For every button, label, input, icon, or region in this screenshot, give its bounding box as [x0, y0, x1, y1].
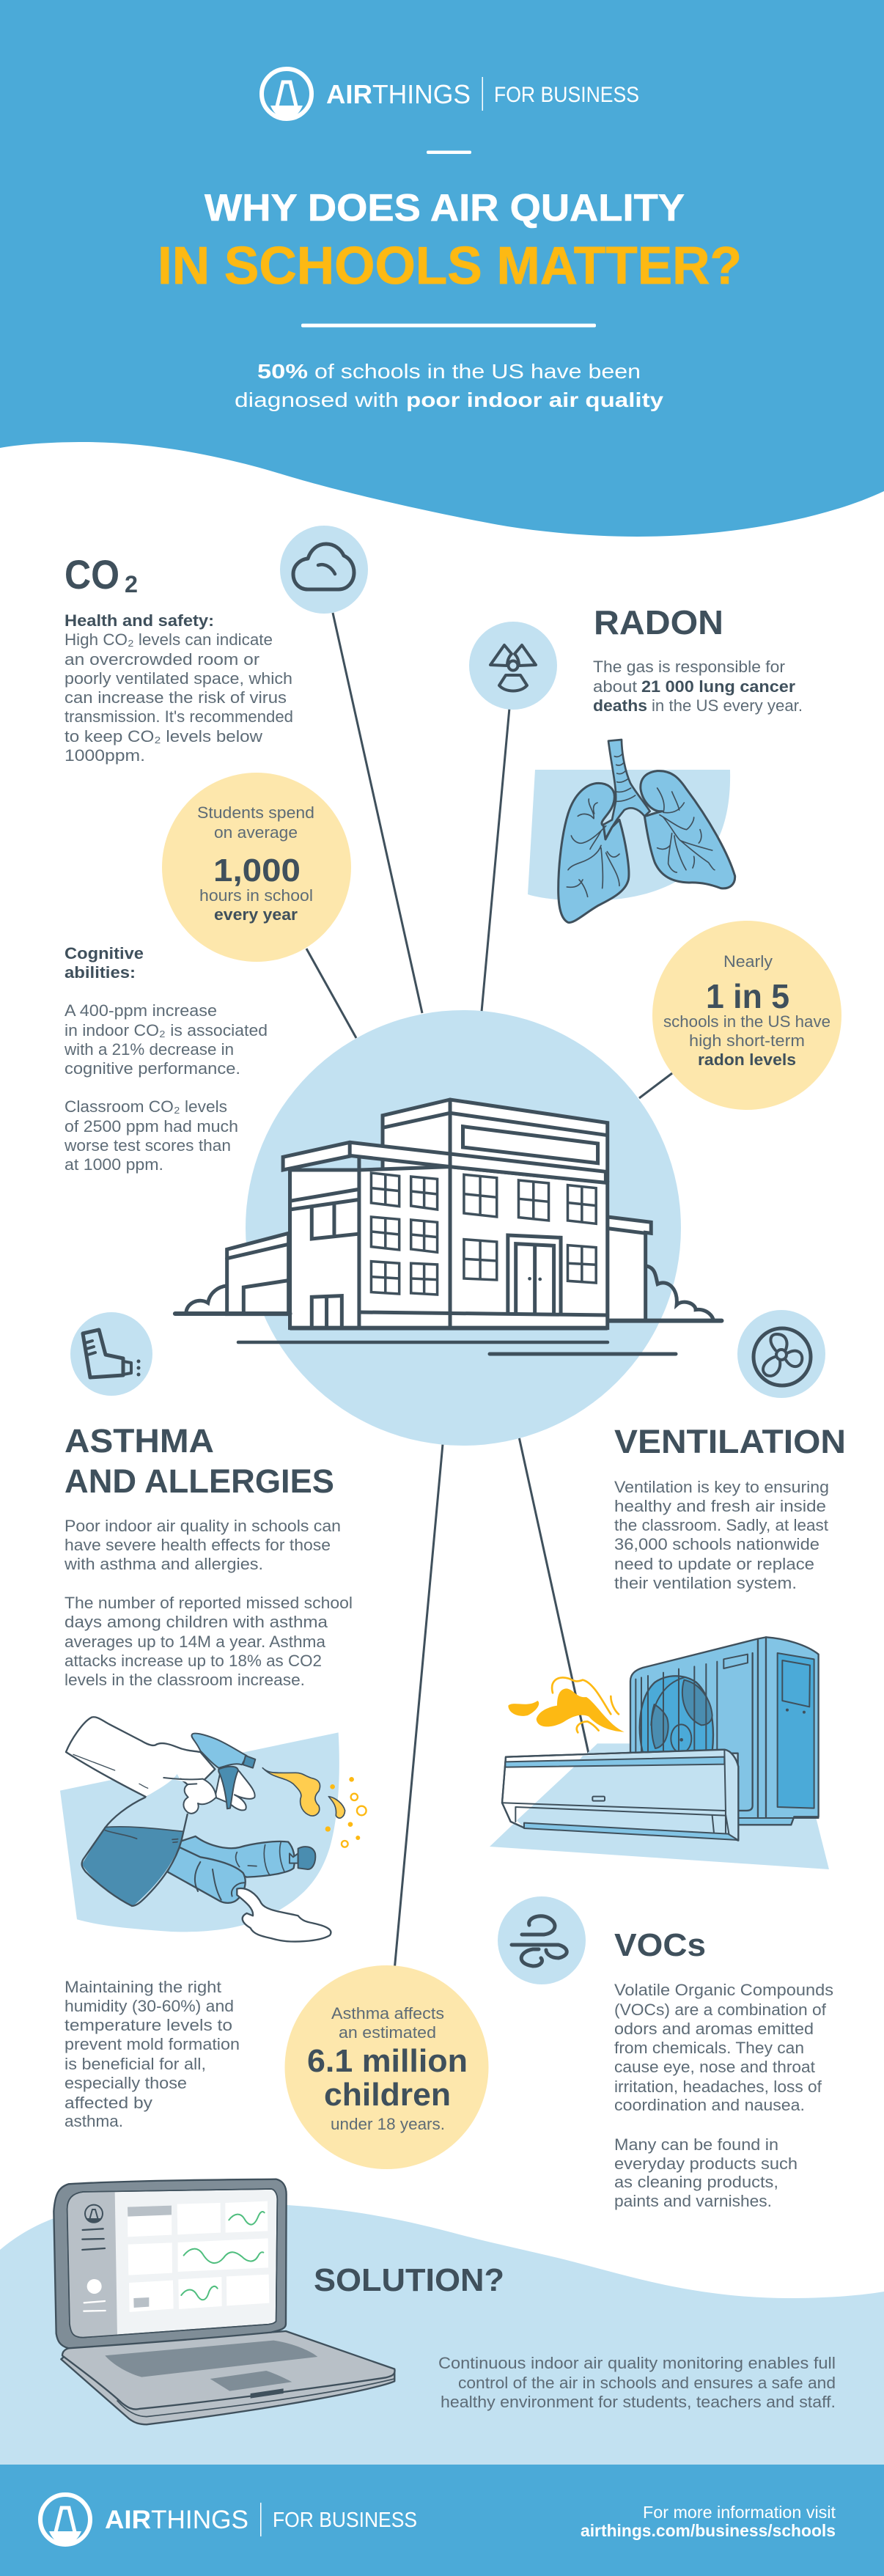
- heading: asthma and allergies: ASTHMA: [65, 1422, 214, 1460]
- text: asthma: Poor indoor air quality in schools can: [65, 1517, 341, 1535]
- text: VOCs: as cleaning products,: [614, 2173, 778, 2191]
- text: VOCs: odors and aromas emitted: [614, 2020, 814, 2038]
- callout: 6.1 million children: children: [324, 2077, 451, 2113]
- text: asthma: [64, 1517, 353, 1689]
- heading: ventilation: VENTILATION: [614, 1423, 846, 1460]
- text: cognitive abilities: abilities:: [65, 963, 136, 982]
- callout: 1,000 hours: on average: [214, 823, 298, 842]
- text: asthma: averages up to 14M a year. Asthma: [65, 1633, 326, 1651]
- text: radon: 21 000 lung cancer: [641, 677, 795, 696]
- center circle: [246, 1010, 681, 1446]
- heading: CO2: 2: [125, 571, 138, 597]
- connector lines: [306, 613, 672, 1967]
- header logo: [262, 69, 639, 119]
- text: humidity: [65, 1978, 240, 2130]
- heading: CO2: CO: [65, 551, 119, 597]
- text: humidity: especially those: [65, 2074, 187, 2092]
- ventilation section: [490, 1310, 846, 1869]
- text: health and safety: an overcrowded room or: [65, 650, 259, 669]
- school building illustration: [175, 1100, 721, 1328]
- solution wave panel: [0, 2201, 884, 2465]
- text: humidity: affected by: [65, 2094, 152, 2112]
- text: VOCs: Many can be found in: [614, 2135, 778, 2154]
- heading: VOCs: VOCs: [614, 1927, 706, 1963]
- air conditioner illustration: [490, 1637, 829, 1869]
- text: VOCs: cause eye, nose and throat: [614, 2058, 815, 2076]
- callout: 1,000 hours: 1,000: [213, 853, 301, 888]
- text: cognitive abilities: at 1000 ppm.: [65, 1155, 163, 1174]
- lungs illustration: [528, 740, 735, 922]
- header subtitle: diagnosed with: [235, 389, 399, 411]
- text: radon: [593, 658, 803, 715]
- text: humidity: Maintaining the right: [65, 1978, 221, 1996]
- heading: radon: RADON: [594, 603, 723, 641]
- heading: asthma and allergies: AND ALLERGIES: [65, 1462, 334, 1500]
- text: ventilation: their ventilation system.: [614, 1574, 797, 1592]
- radon section: [469, 603, 841, 1110]
- solution heading: SOLUTION?: [314, 2262, 504, 2298]
- title: WHY DOES AIR QUALITY: [205, 187, 685, 229]
- text: radon: deaths: [593, 696, 647, 715]
- header logo: FOR BUSINESS: [494, 83, 639, 107]
- header panel: [0, 0, 884, 537]
- solution text: control of the air in schools and ensures a safe and: [458, 2374, 836, 2392]
- text: ventilation: need to update or replace: [614, 1555, 814, 1573]
- callout: 1,000 hours: Students spend: [197, 803, 314, 822]
- text: radon: in the US every year.: [652, 696, 803, 715]
- footer link text: For more information visit: [643, 2503, 836, 2522]
- solution text: Continuous indoor air quality monitoring enables full: [438, 2354, 836, 2372]
- header logo: THINGS: [372, 79, 471, 109]
- title: IN SCHOOLS MATTER?: [158, 237, 742, 295]
- text: cognitive abilities: of 2500 ppm had much: [65, 1117, 238, 1136]
- text: health and safety: 1000ppm.: [65, 746, 145, 765]
- heading: asthma and allergies: [65, 1422, 334, 1500]
- asthma section: [60, 1312, 488, 2169]
- footer link text: [581, 2503, 836, 2540]
- callout: 1 in 5: high short-term: [689, 1031, 805, 1050]
- text: cognitive abilities: in indoor CO₂ is associated: [65, 1021, 268, 1039]
- header subtitle: [235, 360, 663, 411]
- footer logo: FOR BUSINESS: [273, 2509, 417, 2532]
- icon: radiation: [469, 622, 557, 710]
- text: VOCs: irritation, headaches, loss of: [614, 2078, 822, 2096]
- text: cognitive abilities: [64, 944, 268, 1174]
- text: VOCs: Volatile Organic Compounds: [614, 1981, 833, 1999]
- text: ventilation: 36,000 schools nationwide: [614, 1535, 819, 1553]
- text: ventilation: the classroom. Sadly, at least: [614, 1516, 828, 1534]
- text: asthma: The number of reported missed school: [65, 1594, 353, 1612]
- text: health and safety: [65, 611, 293, 765]
- footer logo: [40, 2495, 417, 2544]
- laptop illustration: [54, 2179, 395, 2424]
- icon: inhaler: [70, 1312, 152, 1396]
- text: asthma: levels in the classroom increase.: [65, 1671, 305, 1689]
- text: cognitive abilities: cognitive performance.: [65, 1059, 240, 1078]
- text: ventilation: [614, 1478, 829, 1592]
- text: cognitive abilities: Cognitive: [65, 944, 144, 963]
- header logo: AIR: [326, 79, 372, 109]
- header subtitle: 50%: [257, 360, 308, 383]
- callout: 6.1 million children: 6.1 million: [307, 2043, 468, 2079]
- text: health and safety: transmission. It's recommended: [65, 707, 293, 726]
- text: VOCs: paints and varnishes.: [614, 2192, 772, 2210]
- callout: 6.1 million children: an estimated: [339, 2023, 436, 2042]
- text: asthma: days among children with asthma: [65, 1613, 328, 1631]
- text: health and safety: poorly ventilated space, which: [65, 669, 292, 688]
- callout: 1,000 hours: hours in school: [199, 886, 313, 905]
- callout: 1 in 5: 1 in 5: [706, 977, 789, 1015]
- icon: wind: [498, 1896, 586, 1984]
- callout: 1 in 5: radon levels: [698, 1050, 796, 1069]
- text: ventilation: Ventilation is key to ensuring: [614, 1478, 829, 1496]
- cleaning products illustration: [60, 1717, 367, 1942]
- footer logo: THINGS: [151, 2506, 248, 2534]
- text: health and safety: to keep CO₂ levels below: [65, 727, 262, 746]
- text: asthma: have severe health effects for those: [65, 1536, 331, 1554]
- title: [158, 187, 742, 295]
- icon: cloud: [280, 526, 368, 614]
- footer panel: [0, 2465, 884, 2576]
- footer logo: AIR: [105, 2506, 151, 2534]
- text: humidity: prevent mold formation: [65, 2035, 240, 2053]
- CO2 section: [64, 526, 368, 1174]
- callout: 1,000 hours: every year: [214, 905, 298, 924]
- callout: 1,000 hours: [162, 773, 351, 962]
- text: humidity: temperature levels to: [65, 2016, 232, 2034]
- text: asthma: with asthma and allergies.: [64, 1555, 263, 1573]
- callout: 6.1 million children: [284, 1965, 488, 2169]
- solution text: [438, 2354, 836, 2411]
- text: cognitive abilities: Classroom CO₂ levels: [65, 1097, 227, 1116]
- text: humidity: humidity (30-60%) and: [65, 1997, 234, 2015]
- text: radon: about: [593, 677, 637, 696]
- text: asthma: attacks increase up to 18% as CO2: [65, 1652, 322, 1670]
- header subtitle: poor indoor air quality: [406, 389, 663, 411]
- text: health and safety: Health and safety:: [65, 611, 214, 630]
- solution text: healthy environment for students, teachers and staff.: [441, 2393, 836, 2411]
- text: cognitive abilities: A 400-ppm increase: [65, 1001, 217, 1020]
- text: humidity: is beneficial for all,: [65, 2055, 206, 2073]
- VOCs section: [498, 1896, 833, 2210]
- text: VOCs: coordination and nausea.: [614, 2096, 805, 2114]
- text: VOCs: (VOCs) are a combination of: [614, 2001, 827, 2019]
- text: VOCs: [614, 1981, 833, 2210]
- ground lines: [238, 1342, 676, 1354]
- text: health and safety: can increase the risk of virus: [65, 688, 287, 707]
- text: ventilation: healthy and fresh air inside: [614, 1497, 826, 1515]
- callout: 1 in 5: [652, 921, 841, 1110]
- text: radon: The gas is responsible for: [593, 658, 785, 676]
- text: VOCs: from chemicals. They can: [614, 2039, 804, 2057]
- callout: 6.1 million children: under 18 years.: [331, 2115, 445, 2133]
- text: humidity: asthma.: [65, 2112, 123, 2130]
- callout: 6.1 million children: Asthma affects: [331, 2004, 444, 2023]
- icon: fan: [737, 1310, 825, 1398]
- callout: 1 in 5: schools in the US have: [663, 1012, 830, 1031]
- callout: 1 in 5: Nearly: [723, 952, 773, 971]
- text: health and safety: High CO₂ levels can indicate: [65, 630, 273, 649]
- footer link text: airthings.com/business/schools: [581, 2521, 836, 2540]
- text: cognitive abilities: with a 21% decrease in: [64, 1040, 234, 1059]
- header subtitle: of schools in the US have been: [314, 360, 641, 383]
- text: cognitive abilities: worse test scores than: [64, 1136, 231, 1155]
- text: VOCs: everyday products such: [614, 2154, 798, 2173]
